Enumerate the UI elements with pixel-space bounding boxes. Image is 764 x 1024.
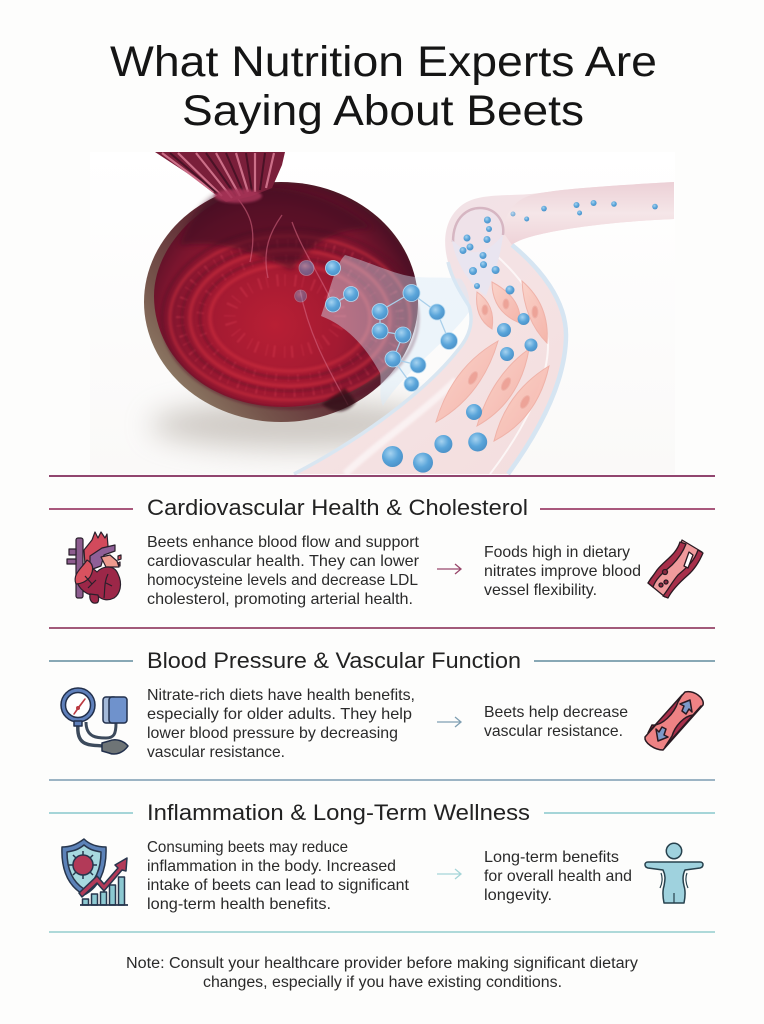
icon: anatomical heart — [67, 532, 121, 603]
section 3: inflammation — [49, 800, 715, 933]
callout text: vessel flexibility. — [484, 582, 597, 599]
text block — [147, 839, 410, 913]
arrow — [437, 869, 461, 879]
section 2: blood pressure — [49, 648, 715, 781]
title — [110, 38, 657, 135]
heading: Inflammation & Long-Term Wellness — [147, 800, 530, 825]
text block — [147, 534, 420, 608]
text block: inflammation in the body. Increased — [147, 858, 396, 875]
text block: intake of beets can lead to significant — [147, 877, 410, 894]
icon: vessel with resistance arrows — [645, 692, 703, 750]
text block: long-term health benefits. — [147, 896, 331, 913]
blood vessel tube — [294, 182, 674, 474]
callout text: Long-term benefits — [484, 849, 619, 866]
callout text: vascular resistance. — [484, 723, 623, 740]
heading: Blood Pressure & Vascular Function — [147, 648, 521, 673]
blood particles — [382, 200, 658, 473]
note: changes, especially if you have existing conditions. — [203, 974, 562, 991]
note: Note: Consult your healthcare provider before making significant dietary — [126, 955, 638, 972]
callout text — [484, 544, 641, 599]
hero illustration: beet and blood vessel — [90, 152, 675, 474]
text block: Beets enhance blood flow and support — [147, 534, 420, 551]
title: Saying About Beets — [182, 87, 584, 135]
text block: vascular resistance. — [147, 744, 285, 761]
callout text — [484, 704, 628, 740]
text block: cardiovascular health. They can lower — [147, 553, 420, 570]
callout text: Foods high in dietary — [484, 544, 630, 561]
text block: especially for older adults. They help — [147, 706, 412, 723]
note — [126, 955, 638, 991]
text block: Consuming beets may reduce — [147, 839, 348, 856]
icon: human figure — [645, 843, 703, 903]
callout text: nitrates improve blood — [484, 563, 641, 580]
callout text: longevity. — [484, 887, 552, 904]
text block: homocysteine levels and decrease LDL — [147, 572, 418, 589]
callout text: for overall health and — [484, 868, 632, 885]
text block: Nitrate-rich diets have health benefits, — [147, 687, 415, 704]
text block — [147, 687, 415, 761]
section 1: cardiovascular health — [49, 475, 715, 629]
arrow — [437, 717, 461, 727]
beet stems — [155, 152, 285, 203]
nitrate molecules — [295, 260, 458, 392]
text block: lower blood pressure by decreasing — [147, 725, 398, 742]
title: What Nutrition Experts Are — [110, 38, 657, 86]
muscle cells — [436, 281, 549, 441]
icon: blood pressure gauge — [61, 688, 128, 754]
arrow — [437, 564, 461, 574]
callout text: Beets help decrease — [484, 704, 628, 721]
icon: shield with virus and growth chart — [62, 839, 128, 905]
callout text — [484, 849, 632, 904]
icon: flexible vessel — [648, 540, 703, 598]
heading: Cardiovascular Health & Cholesterol — [147, 495, 528, 520]
text block: cholesterol, promoting arterial health. — [147, 591, 413, 608]
translucent membrane — [321, 255, 469, 406]
beet body — [144, 182, 418, 422]
beet shadow — [150, 401, 450, 449]
